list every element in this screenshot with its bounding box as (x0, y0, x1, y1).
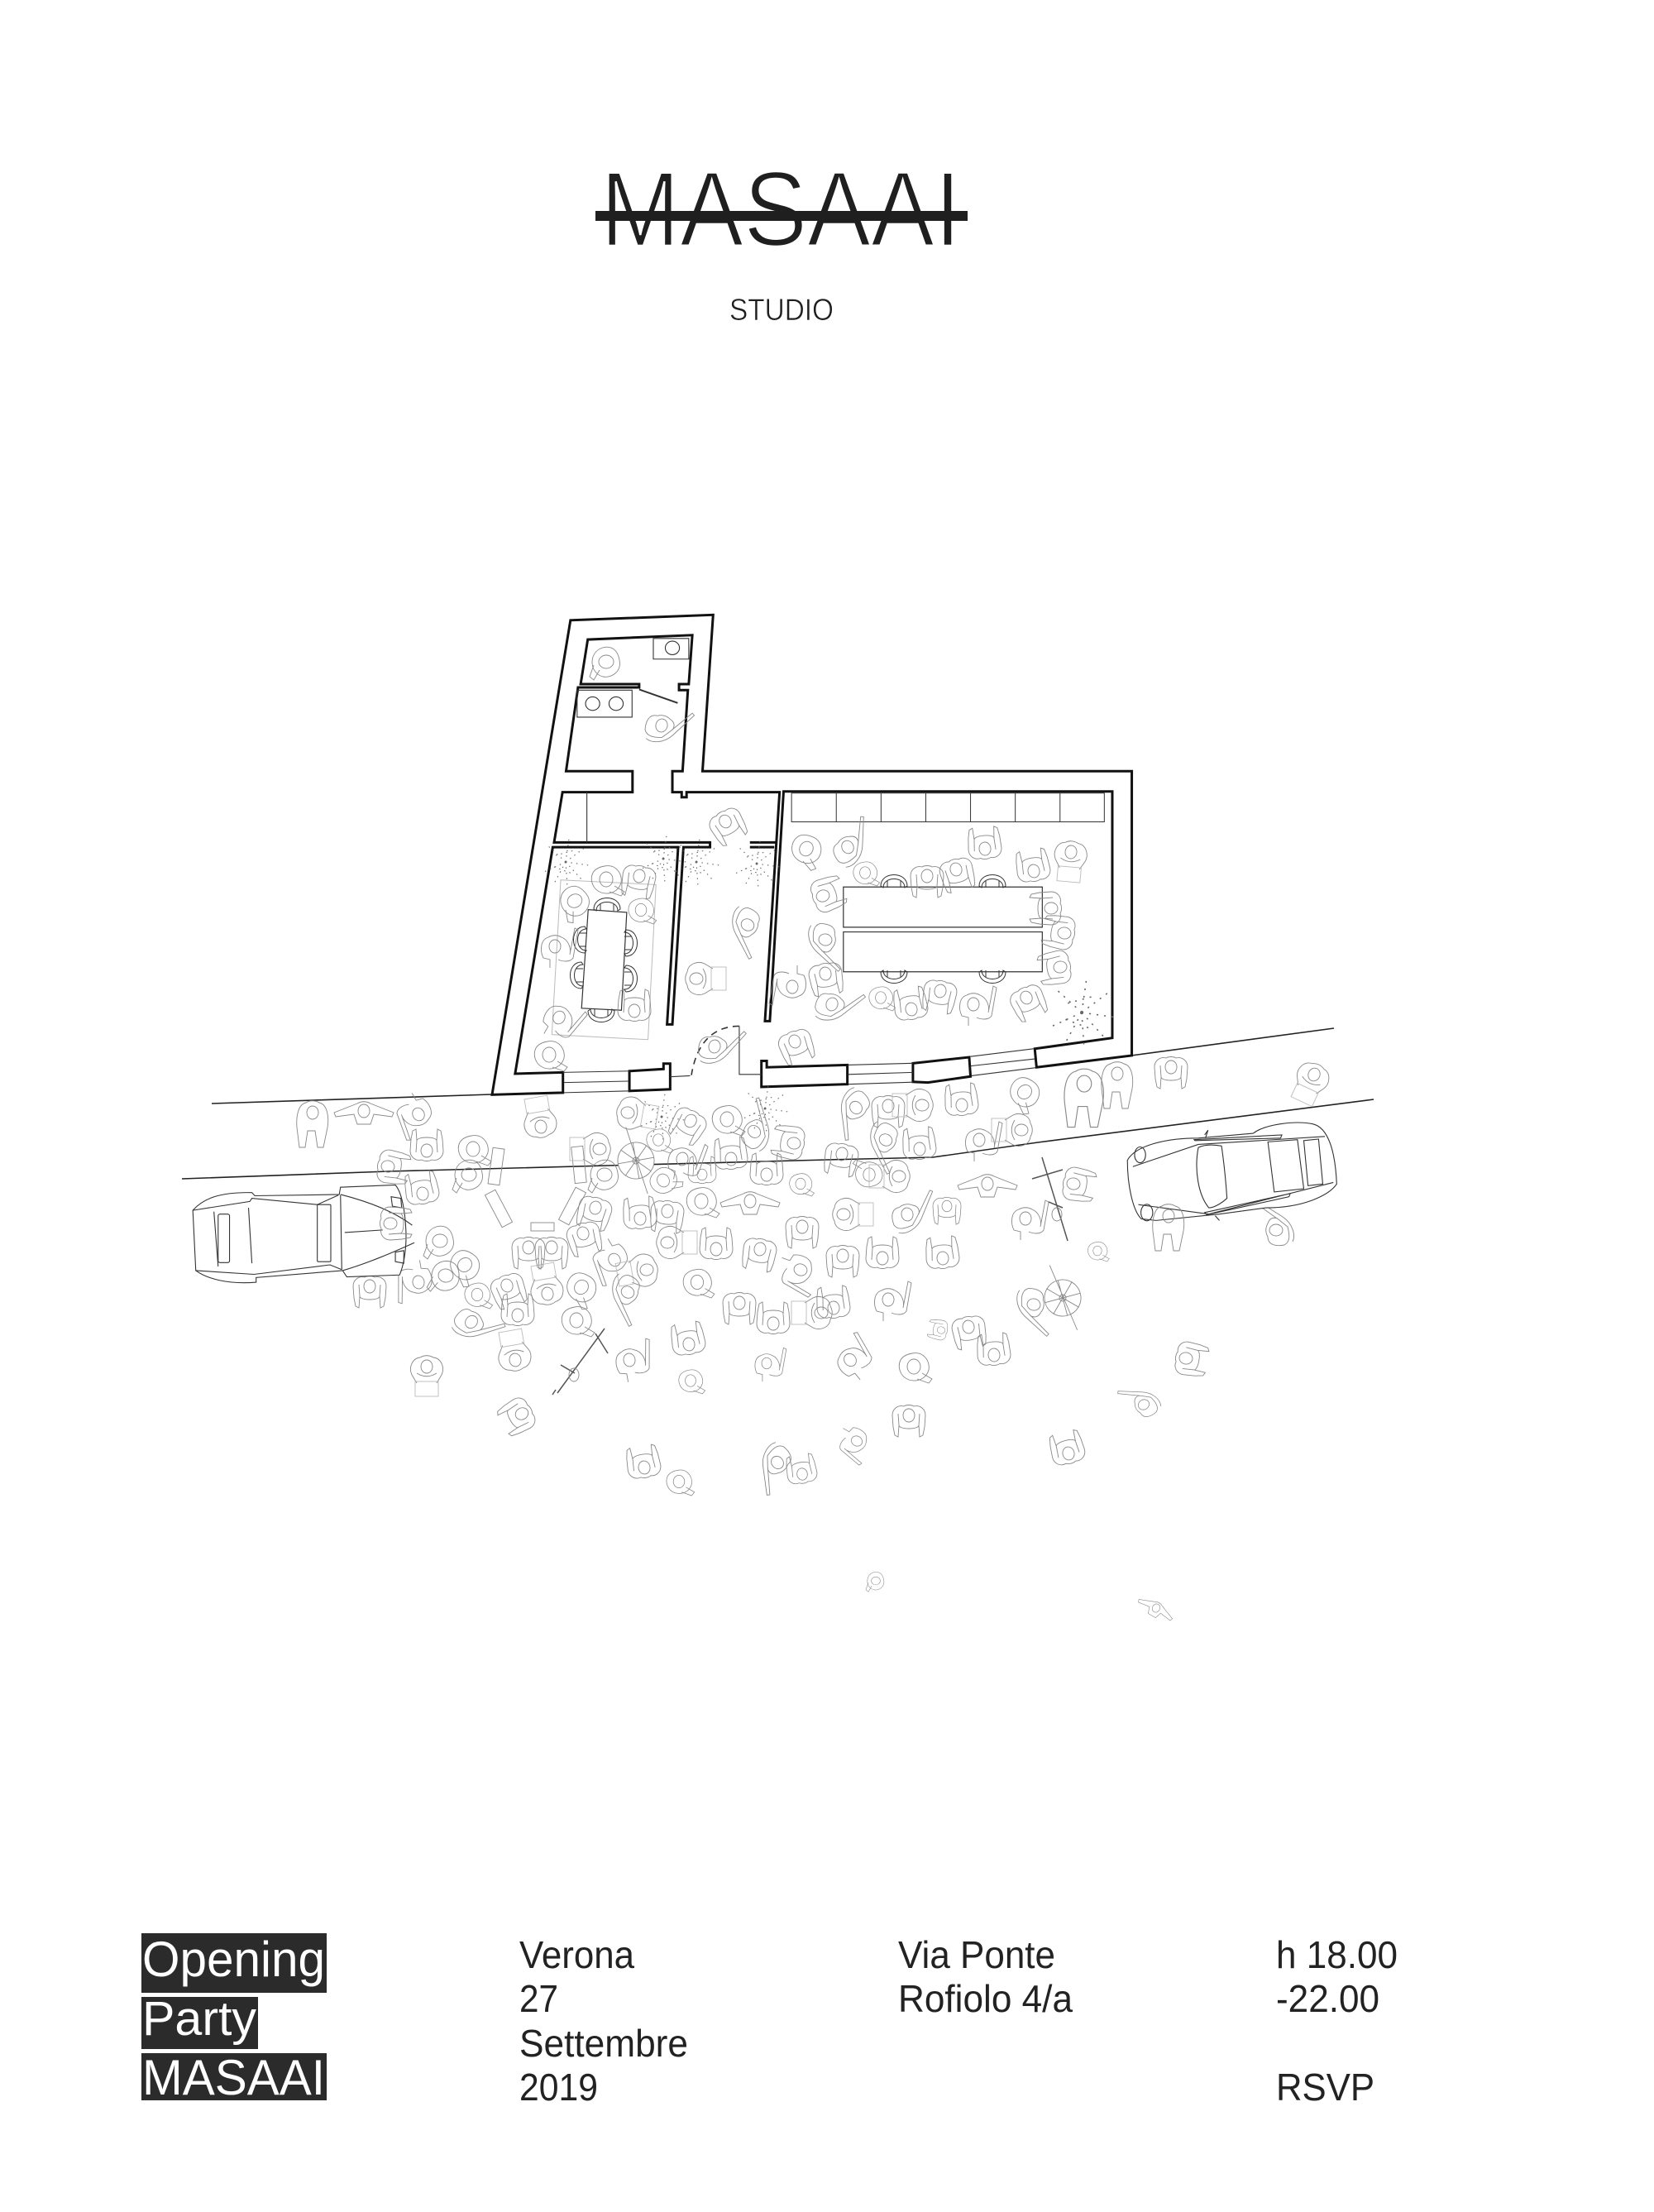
footer label: Opening Party MASAAI (141, 1932, 327, 2105)
logo title: MASAAI: MASAAI (600, 151, 961, 269)
left car (193, 1185, 414, 1283)
crowd on the street, right half (815, 1057, 1333, 1625)
footer label: Opening Party MASAAI: Party (142, 1992, 256, 2046)
bathroom fixtures (577, 639, 689, 717)
building walls (492, 615, 1132, 1094)
footer column: address (898, 1933, 1073, 2020)
footer column: place and date: Settembre (519, 2022, 688, 2065)
footer column: time and RSVP: h 18.00 (1276, 1933, 1398, 1976)
footer column: address: Via Ponte (898, 1933, 1055, 1976)
people inside the studio (534, 647, 1088, 1071)
plants (544, 835, 1114, 1142)
shelving along the north wall (791, 793, 1104, 821)
footer column: place and date: Verona (519, 1933, 634, 1976)
footer column: time and RSVP: RSVP (1276, 2066, 1374, 2109)
crowd on the street, left half (297, 1089, 832, 1496)
footer column: place and date: 2019 (519, 2066, 598, 2109)
logo subtitle: STUDIO: STUDIO (729, 293, 834, 327)
rug under the meeting table (552, 880, 656, 1040)
footer column: time and RSVP (1276, 1933, 1398, 2109)
footer label: Opening Party MASAAI: Opening (142, 1932, 325, 1987)
street kerb lines (182, 1028, 1374, 1179)
footer column: time and RSVP: -22.00 (1276, 1977, 1379, 2020)
chairs around the tables (571, 875, 1006, 1022)
windows and thin partitions (563, 689, 1035, 1093)
work tables (581, 887, 1042, 1010)
footer column: address: Rofiolo 4/a (898, 1977, 1073, 2020)
footer label: Opening Party MASAAI: MASAAI (142, 2050, 325, 2105)
footer column: place and date: 27 (519, 1977, 558, 2020)
footer column: place and date (519, 1933, 688, 2109)
people at the cars (380, 1204, 1184, 1251)
floor plan of the studio (492, 615, 1132, 1094)
right car (1127, 1123, 1336, 1221)
